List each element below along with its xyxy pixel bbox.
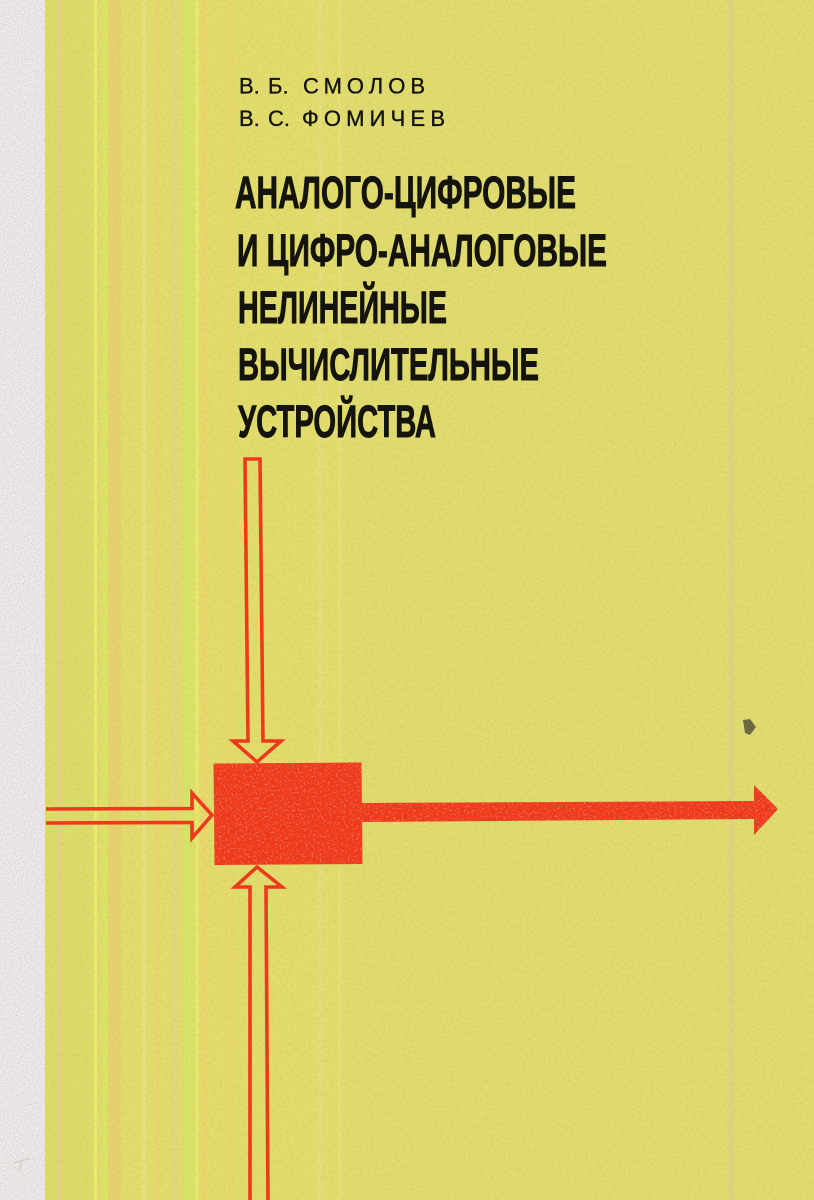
arrow: left input [46,793,212,838]
arrow: top input [233,459,281,762]
author: V. S. Fomichev: В. [239,106,260,131]
title: И ЦИФРО-АНАЛОГОВЫЕ [237,225,607,276]
author: V. S. Fomichev: С. [268,106,290,131]
title: АНАЛОГО-ЦИФРОВЫЕ [235,167,576,218]
diagram: block with arrows [46,459,778,1200]
author: V. S. Fomichev [239,106,445,131]
title: УСТРОЙСТВА [238,396,436,447]
arrow: bottom input [235,867,282,1200]
speck on cover [743,719,756,735]
author: V. S. Fomichev: ФОМИЧЕВ [302,106,445,131]
spine mark [14,1158,30,1172]
spine: grey-white cloth [0,0,45,1200]
arrow: right output [362,785,778,835]
title [235,167,607,447]
red block [214,762,362,865]
title: НЕЛИНЕЙНЫЕ [238,282,447,333]
ink wear [214,762,778,865]
author: V. B. Smolov [239,74,425,98]
author: V. B. Smolov: СМОЛОВ [303,74,425,98]
author: V. B. Smolov: Б. [268,74,289,98]
title: ВЫЧИСЛИТЕЛЬНЫЕ [238,339,539,390]
author: V. B. Smolov: В. [239,74,260,98]
